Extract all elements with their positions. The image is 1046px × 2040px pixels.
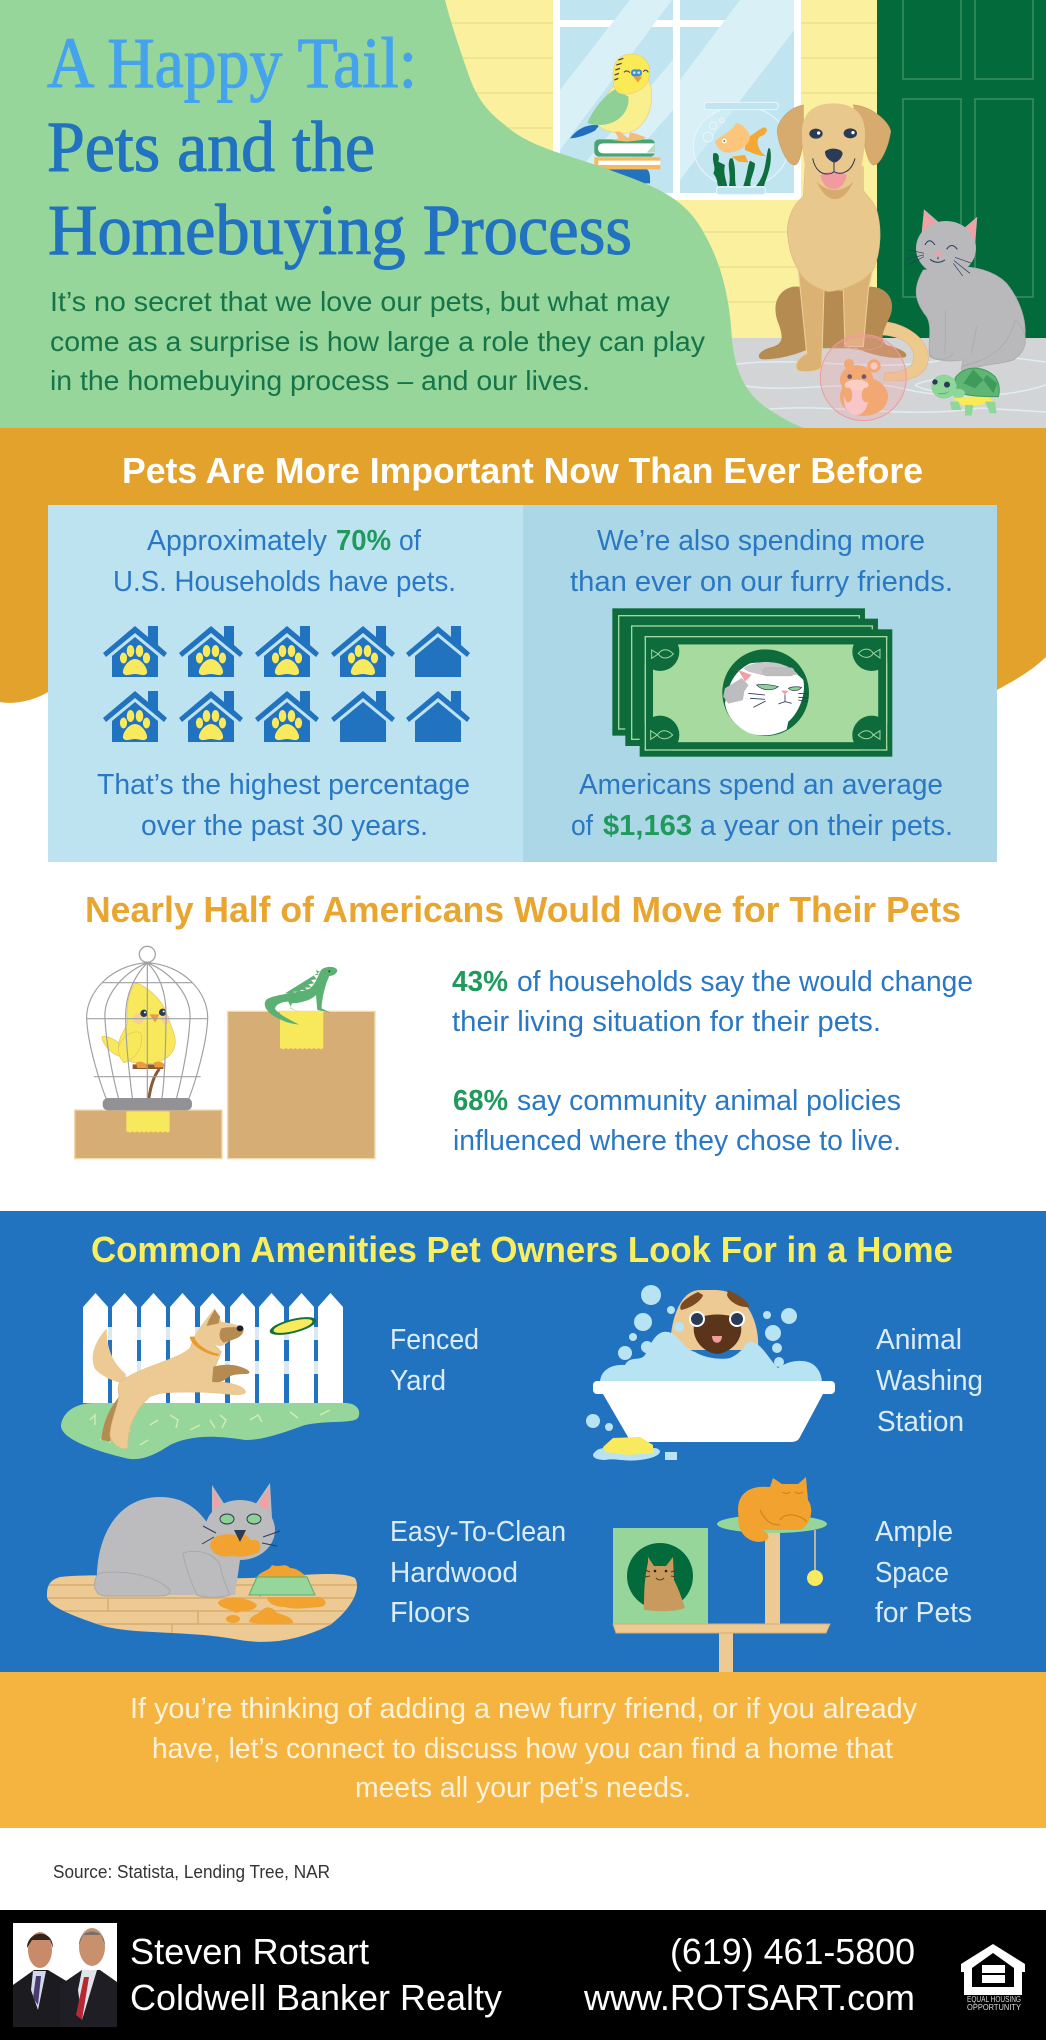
title: [47, 23, 632, 270]
panel: spending: We’re also spending more: [597, 525, 925, 557]
floor: [700, 338, 1046, 428]
panel: households: Approximately: [147, 525, 327, 557]
parakeet on books: [570, 54, 660, 183]
panel: households: of: [399, 525, 422, 557]
text: move statistics: their living situation for their pets.: [452, 1006, 881, 1038]
text: fenced yard: Yard: [390, 1365, 446, 1397]
text: move statistics: influenced where they chose to live.: [453, 1125, 901, 1157]
agent contact: [583, 1931, 915, 2018]
hamster ball: [820, 335, 906, 421]
heading: amenities: Common Amenities Pet Owners Look For in a Home: [91, 1229, 953, 1270]
equal housing logo: [961, 1944, 1025, 2012]
call to action band: meets all your pet’s needs.: [355, 1772, 691, 1804]
turtle: [931, 368, 999, 416]
text: ample space: [875, 1516, 972, 1629]
intro text: It’s no secret that we love our pets, but what may: [50, 286, 670, 317]
call to action band: have, let’s connect to discuss how you can find a home that: [152, 1733, 893, 1765]
title: Pets and the: [47, 107, 375, 187]
panel: households: That’s the highest percentage: [97, 769, 470, 801]
window: [553, 0, 801, 200]
panel: spending: [523, 505, 997, 862]
agent contact: www.ROTSART.com: [583, 1977, 915, 2018]
panel: spending: $1,163: [603, 810, 692, 842]
text: hardwood floors: Floors: [390, 1597, 470, 1629]
panel: spending: of: [571, 810, 594, 842]
panel: amenities: [0, 1211, 1046, 1672]
panel: households: over the past 30 years.: [141, 810, 428, 842]
heading: would move: Nearly Half of Americans Would Move for Their Pets: [85, 889, 961, 930]
heading: pets more important: Pets Are More Important Now Than Ever Before: [122, 450, 923, 491]
title: A Happy Tail:: [47, 23, 417, 103]
text: fenced yard: [390, 1324, 479, 1397]
grey cat: [905, 209, 1025, 374]
intro text: [50, 286, 705, 396]
title: Homebuying Process: [48, 190, 632, 270]
footer: [0, 1910, 1046, 2040]
text: washing station: Washing: [876, 1365, 983, 1397]
text: washing station: [876, 1324, 983, 1438]
icons: ten houses, seven with paws: [103, 626, 470, 742]
text: hardwood floors: [390, 1516, 566, 1629]
agent contact: (619) 461-5800: [670, 1931, 915, 1972]
text: move statistics: [452, 966, 973, 1157]
orange section background: [0, 428, 1046, 703]
goldfish bowl: [693, 102, 789, 194]
text: ample space: for Pets: [875, 1597, 972, 1629]
text: move statistics: say community animal policies: [517, 1085, 901, 1117]
intro text: come as a surprise is how large a role they can play: [50, 326, 705, 357]
illustration: fenced yard with dog: [61, 1293, 359, 1459]
illustration: cat tree: [613, 1477, 830, 1672]
agent name: Steven Rotsart: [130, 1931, 369, 1972]
panel: spending: than ever on our furry friends.: [570, 566, 953, 598]
panel: spending: Americans spend an average: [579, 769, 943, 801]
panel: households: [48, 505, 523, 862]
text: washing station: Station: [877, 1406, 964, 1438]
agent name: [130, 1931, 502, 2018]
green hero blob: [0, 0, 805, 428]
illustration: pug in bath tub: [586, 1285, 835, 1461]
door: [877, 0, 1046, 338]
text: move statistics: of households say the would change: [517, 966, 973, 998]
intro text: in the homebuying process – and our lives.: [50, 365, 590, 396]
text: ample space: Space: [875, 1557, 949, 1589]
text: fenced yard: Fenced: [390, 1324, 479, 1356]
equal housing logo: OPPORTUNITY: [967, 2003, 1022, 2012]
call to action band: If you’re thinking of adding a new furry friend, or if you already: [130, 1693, 917, 1725]
text: move statistics: 68%: [453, 1085, 508, 1117]
equal housing logo: EQUAL HOUSING: [967, 1995, 1021, 2004]
agent photo: [13, 1923, 117, 2027]
panel: households: 70%: [336, 525, 391, 557]
text: ample space: Ample: [875, 1516, 953, 1548]
panel: spending: a year on their pets.: [700, 810, 953, 842]
agent name: Coldwell Banker Realty: [130, 1977, 502, 2018]
illustration: cat and messy hardwood floor: [40, 1483, 370, 1645]
panel: households: U.S. Households have pets.: [113, 566, 456, 598]
text: hardwood floors: Easy-To-Clean: [390, 1516, 566, 1548]
source note: Source: Statista, Lending Tree, NAR: [53, 1862, 330, 1882]
golden retriever: [759, 103, 928, 381]
hero panel: [0, 0, 1046, 428]
icon: cat dollar bills: [612, 608, 892, 757]
call to action band: [0, 1672, 1046, 1828]
text: hardwood floors: Hardwood: [390, 1557, 518, 1589]
text: move statistics: 43%: [452, 966, 508, 998]
illustration: bird cage, iguana and moving boxes: [75, 946, 375, 1159]
text: washing station: Animal: [876, 1324, 962, 1356]
